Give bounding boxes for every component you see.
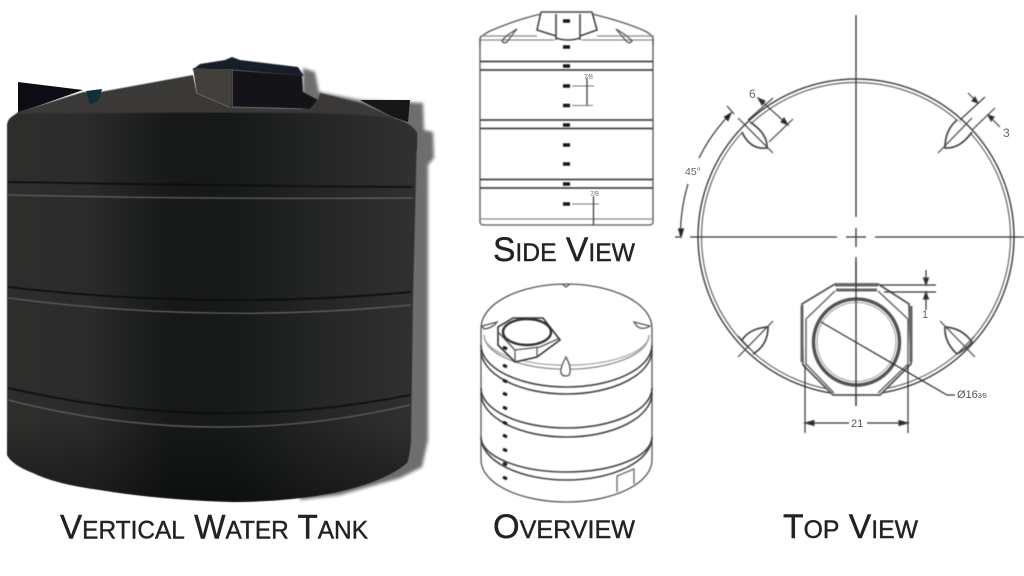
- dimension label: upper fraction: 7⁄8: [584, 74, 593, 81]
- top rim: [481, 284, 652, 328]
- width dimension: [805, 365, 908, 433]
- dimension label: 1: 1: [922, 309, 928, 321]
- right roof fin: [360, 100, 410, 122]
- tank base: [481, 460, 652, 502]
- diagram: side view: [480, 12, 654, 225]
- 45 degree arc: [678, 106, 734, 237]
- band highlights: [8, 195, 413, 427]
- vent: top right: [938, 93, 1000, 153]
- hatch sides: [498, 332, 560, 362]
- diagram: overview: [481, 284, 652, 502]
- roof vent: [86, 89, 102, 105]
- caption: top view: TOP VIEW: [783, 508, 918, 546]
- hatch: [537, 12, 597, 40]
- manway inner ring: [817, 302, 896, 382]
- dimension label: 21: 21: [851, 418, 863, 430]
- manway flats: [802, 285, 911, 362]
- hatch lid: [192, 57, 304, 76]
- band lines: [480, 62, 653, 219]
- tank side walls: [481, 328, 652, 460]
- dimension label: 45 degrees: 45°: [685, 166, 701, 178]
- inner wall circle: [702, 82, 1010, 392]
- tank walls and base: [480, 38, 653, 225]
- caption: vertical water tank: VERTICAL WATER TANK: [60, 508, 368, 546]
- dimension lines: [572, 78, 599, 225]
- band shadows: [8, 182, 413, 413]
- bands: [481, 345, 652, 480]
- dimension label: diameter: Ø163⁄8: [957, 389, 987, 401]
- right roof vent: [616, 29, 632, 43]
- ruler marks: [503, 347, 507, 479]
- dome outline: [480, 14, 541, 46]
- left roof vent: [502, 29, 517, 43]
- hatch lit face: [193, 68, 232, 108]
- hatch shadow face: [232, 70, 318, 109]
- tank drop shadow: [300, 68, 434, 500]
- caption: overview: OVERVIEW: [493, 508, 635, 546]
- ruler marks: [563, 21, 570, 204]
- caption: side view: SIDE VIEW: [493, 231, 635, 269]
- vent: bottom right: [940, 321, 975, 357]
- vent: top left: [738, 98, 793, 153]
- front vent: [561, 357, 570, 376]
- dimension label: 6: 6: [749, 87, 756, 101]
- tank body: [7, 113, 417, 502]
- right vent: [634, 322, 650, 328]
- manway octagon: [802, 284, 911, 395]
- manway opening: [814, 299, 900, 385]
- access panel: [617, 469, 634, 492]
- left vent: [482, 322, 497, 329]
- lower body shading: [7, 420, 411, 502]
- diameter leader: [821, 322, 955, 395]
- hatch opening: [503, 319, 551, 345]
- outer wall circle: [698, 79, 1014, 395]
- left roof fin: [18, 82, 83, 113]
- tank roof: [9, 75, 417, 150]
- manway center line: [855, 262, 857, 406]
- center lines: [675, 15, 1024, 406]
- vent: bottom left: [738, 321, 773, 357]
- hatch octagon: [498, 318, 560, 362]
- roof base lines: [480, 36, 654, 40]
- dimension label: 3: 3: [1003, 126, 1010, 140]
- dimension label: lower fraction: 7⁄8: [590, 191, 599, 198]
- photo: vertical water tank: [7, 57, 434, 502]
- rim notch: [562, 284, 570, 287]
- diagram: top view: [675, 15, 1024, 433]
- lip dimension: [880, 270, 936, 310]
- inner roof arc: [484, 335, 649, 369]
